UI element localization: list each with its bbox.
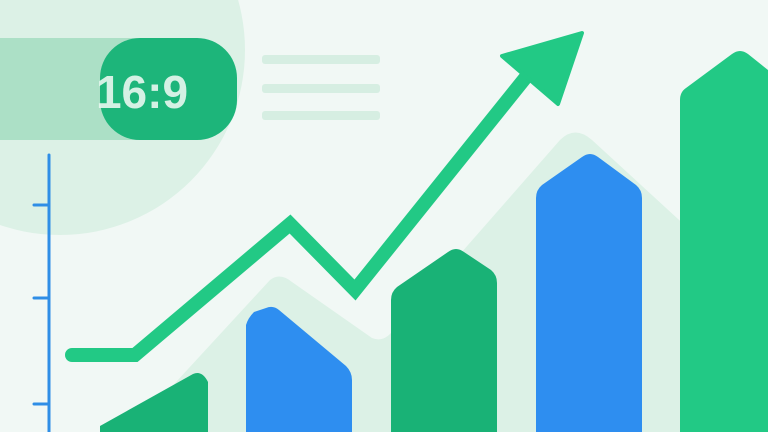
text placeholder lines: [262, 55, 380, 120]
y axis: [34, 155, 49, 432]
bar 1: [100, 373, 208, 432]
trend arrow line: [72, 72, 530, 355]
bar 4: [536, 154, 642, 432]
bar 5: [680, 51, 768, 432]
arrow head: [502, 33, 582, 104]
background hill: [130, 132, 690, 432]
label text: 16:9: 16:9: [96, 66, 188, 118]
background circle: [0, 0, 245, 235]
bar 2: [246, 307, 352, 432]
bar 3: [391, 249, 497, 432]
label band: [0, 38, 180, 140]
label pill: [96, 38, 237, 140]
